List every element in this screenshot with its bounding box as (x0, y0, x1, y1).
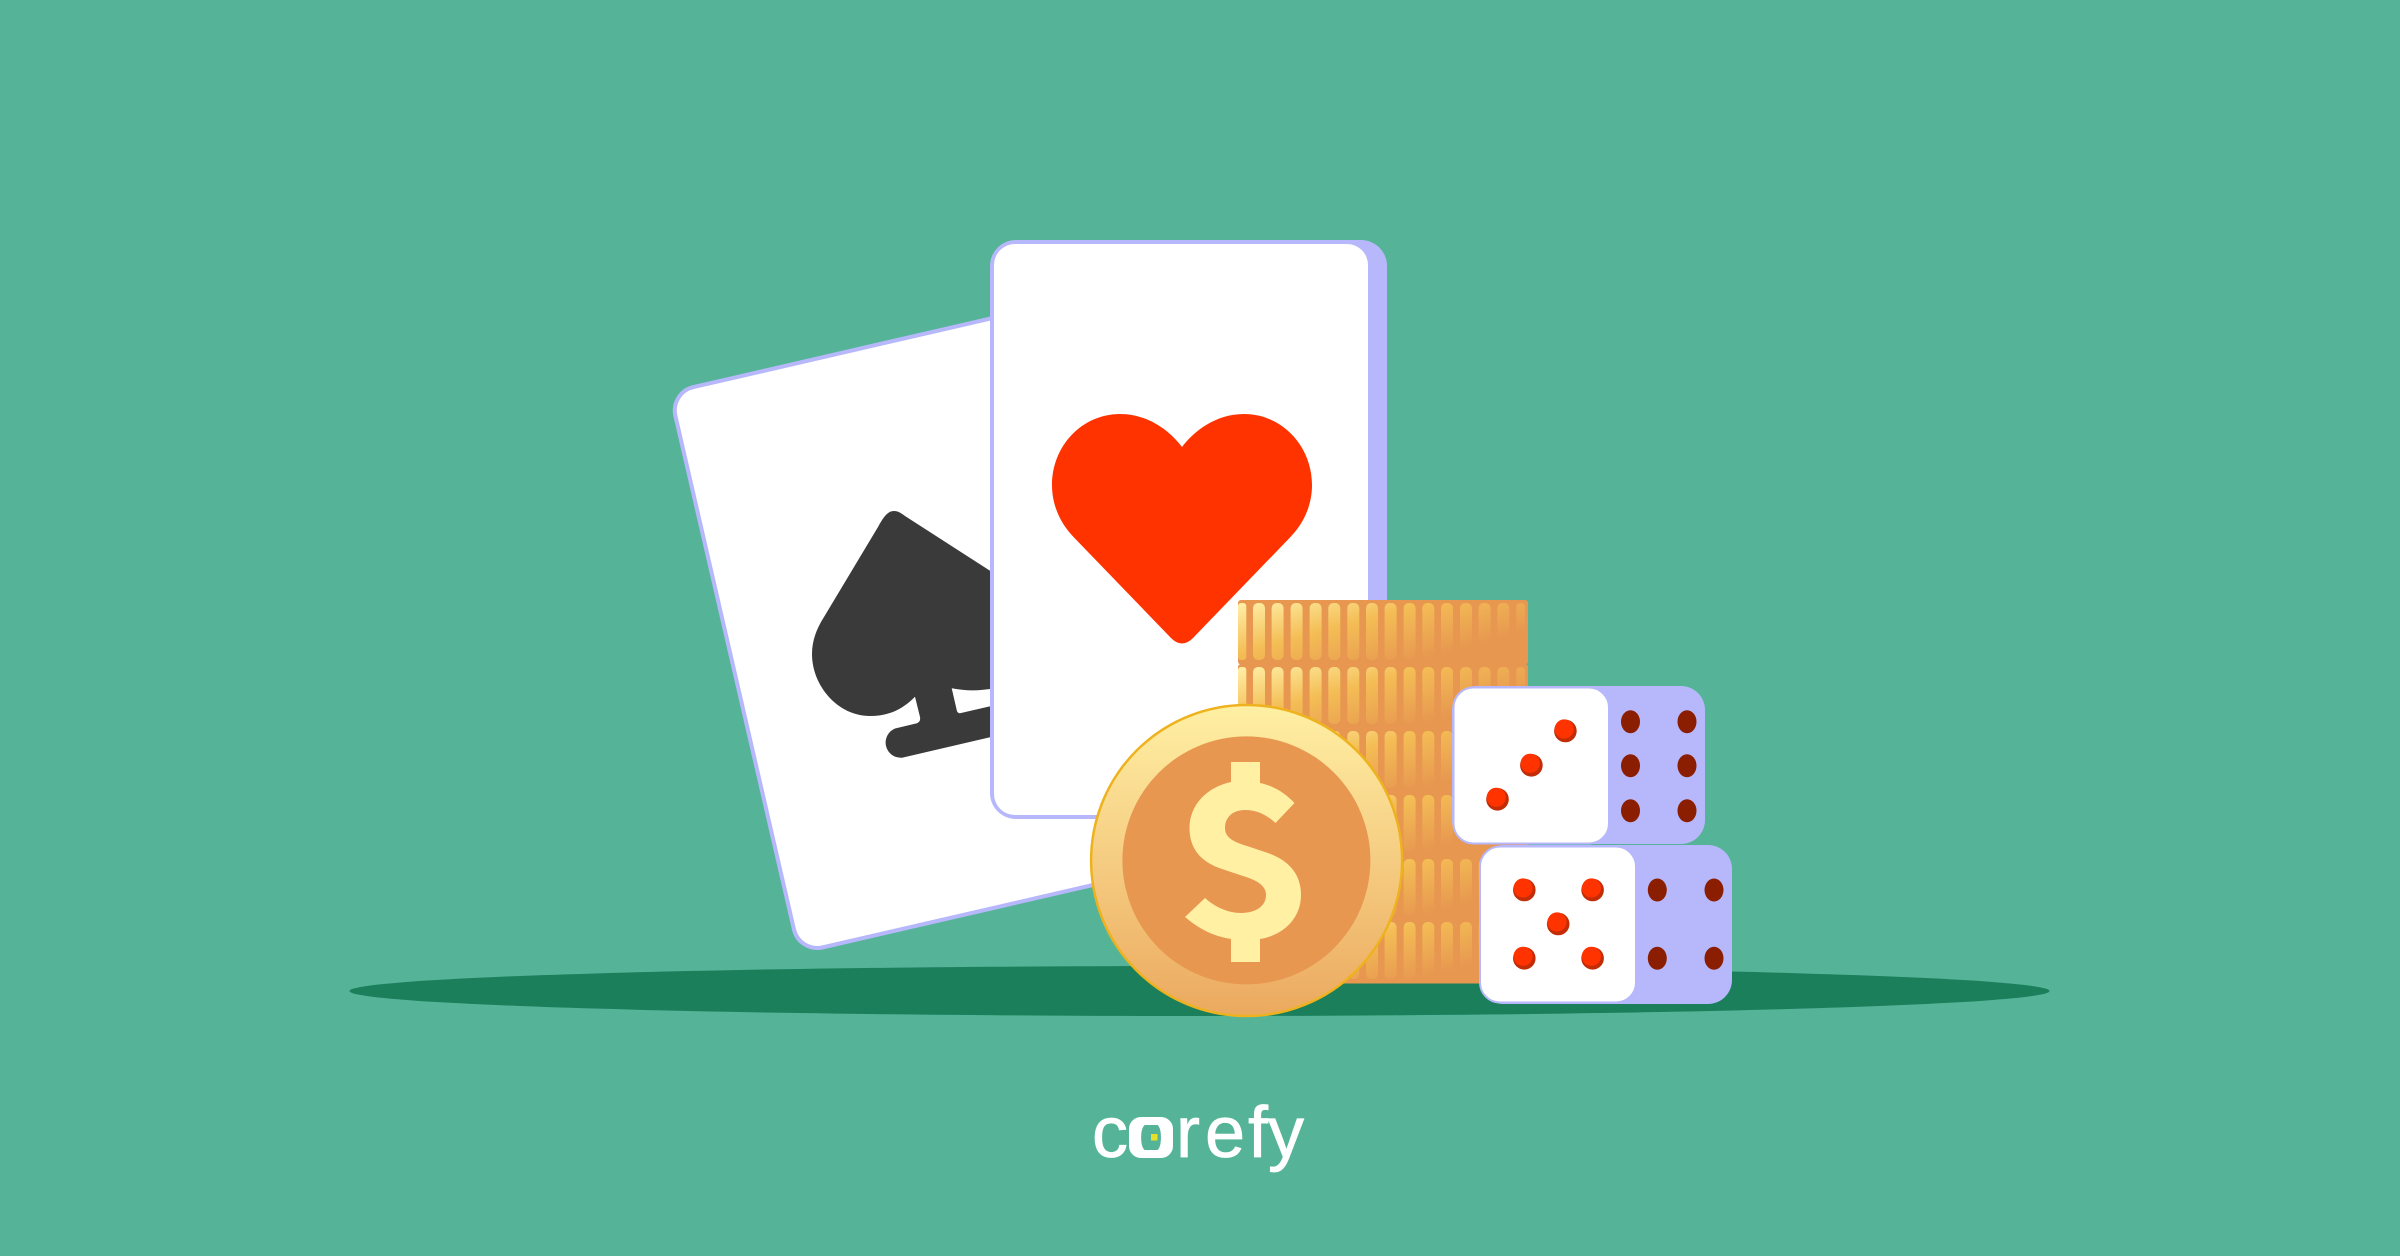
die face (1454, 688, 1609, 844)
upper die (1452, 686, 1705, 844)
lower die (1479, 845, 1732, 1004)
pips: three on face (1486, 719, 1577, 811)
logo dot (1151, 1134, 1158, 1140)
logo square o ring (1133, 1121, 1169, 1154)
die side (1452, 686, 1705, 844)
pips: six on side (1621, 710, 1696, 822)
coin rim (1091, 705, 1402, 1016)
icon: heart (1052, 414, 1312, 644)
left playing card with spade (670, 307, 1170, 953)
logo: corefy (1092, 1093, 1304, 1173)
die side (1479, 845, 1732, 1004)
large dollar coin (1091, 705, 1402, 1016)
logo wordmark: corefy (1092, 1093, 1304, 1173)
pips: five on face (1513, 878, 1604, 970)
pips: four on side (1648, 878, 1724, 970)
card body: rotated (670, 307, 1170, 953)
right playing card with heart (990, 240, 1387, 819)
coin centre (1122, 736, 1370, 984)
ground shadow ellipse (350, 966, 2050, 1016)
card back edge (990, 240, 1387, 819)
coin stack (1238, 600, 1528, 984)
die face (1480, 846, 1636, 1002)
icon: spade (812, 511, 1020, 758)
icon: dollar sign (1185, 762, 1301, 962)
card face (994, 244, 1368, 815)
